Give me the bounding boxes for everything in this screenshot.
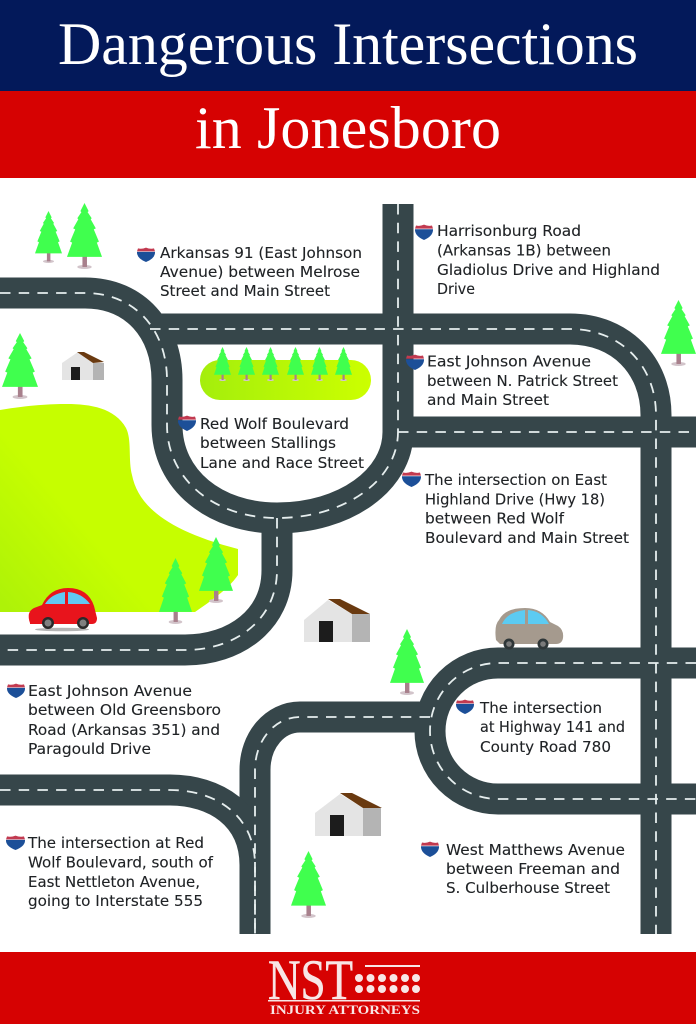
location: East Johnson Avenue, Old Greensboro: East Johnson Avenue: [28, 683, 192, 700]
icon: highway shield: [406, 355, 424, 370]
location: Red Wolf Boulevard: Red Wolf Boulevard: [200, 416, 349, 433]
location: East Johnson Avenue, Old Greensboro: Paragould Drive: [28, 741, 151, 758]
location: East Johnson Avenue, N. Patrick: and Main Street: [427, 392, 549, 409]
icon: highway shield: [6, 836, 25, 850]
lane markings: [0, 204, 696, 934]
car: red: [29, 588, 97, 631]
location: Red Wolf Boulevard, Interstate 555: Wolf Boulevard, south of: [28, 854, 214, 872]
location: East Johnson Avenue, Old Greensboro: [7, 683, 221, 758]
footer band: [0, 949, 696, 1024]
location: Arkansas 91: Street and Main Street: [160, 283, 330, 300]
location: Highway 141: County Road 780: [480, 739, 611, 756]
title banner: [0, 0, 696, 178]
location: East Johnson Avenue, N. Patrick: [406, 354, 618, 409]
location: Harrisonburg Road: (Arkansas 1B) between: [437, 242, 611, 260]
location: West Matthews Avenue: between Freeman and: [446, 861, 620, 878]
location: East Highland Drive: The intersection on East: [424, 472, 607, 489]
house: middle: [304, 599, 370, 642]
icon: highway shield: [456, 700, 474, 714]
location: Highway 141: at Highway 141 and: [480, 719, 625, 736]
title line 2: in Jonesboro: [195, 95, 501, 161]
location: Arkansas 91: Avenue) between Melrose: [160, 264, 360, 281]
location: Highway 141: [456, 700, 625, 756]
icon: highway shield: [415, 225, 433, 240]
house: small: [62, 352, 104, 380]
icon: highway shield: [402, 472, 421, 487]
location: East Highland Drive: between Red Wolf: [425, 510, 565, 528]
road network: [0, 204, 696, 934]
logo: [268, 949, 420, 1017]
location: Arkansas 91: Arkansas 91 (East Johnson: [160, 245, 362, 262]
location: East Johnson Avenue, N. Patrick: between N. Patrick Street: [427, 373, 618, 390]
icon: highway shield: [137, 248, 155, 262]
location: East Highland Drive: Boulevard and Main Street: [425, 530, 629, 547]
location: Arkansas 91: [137, 245, 362, 300]
location: West Matthews Avenue: S. Culberhouse Street: [446, 880, 610, 897]
location: Red Wolf Boulevard, Interstate 555: [6, 835, 214, 910]
location: East Highland Drive: [402, 472, 629, 547]
location: East Highland Drive: Highland Drive (Hwy 18): [425, 492, 605, 508]
logo: NST: [268, 949, 353, 1012]
location: East Johnson Avenue, Old Greensboro: Road (Arkansas 351) and: [28, 722, 220, 739]
location: Red Wolf Boulevard, Interstate 555: The intersection at Red: [27, 835, 204, 852]
icon: highway shield: [178, 416, 196, 431]
location: West Matthews Avenue: West Matthews Avenue: [446, 842, 625, 859]
location: East Johnson Avenue, N. Patrick: East Johnson Avenue: [427, 354, 591, 370]
trees: [2, 203, 696, 918]
icon: highway shield: [421, 842, 439, 857]
car: grey: [495, 608, 563, 650]
location: West Matthews Avenue: [421, 842, 625, 897]
location: East Johnson Avenue, Old Greensboro: between Old Greensboro: [28, 702, 221, 719]
small green park: [200, 360, 371, 400]
location: Harrisonburg Road: Harrisonburg Road: [437, 223, 581, 240]
house: lower: [315, 793, 382, 836]
logo: INJURY ATTORNEYS: [270, 1003, 420, 1017]
location: Harrisonburg Road: Gladiolus Drive and Highland: [437, 262, 660, 279]
location: Red Wolf Boulevard: Lane and Race Street: [200, 455, 364, 472]
location: Red Wolf Boulevard: [178, 416, 364, 472]
location: Harrisonburg Road: Drive: [437, 281, 475, 298]
title line 1: Dangerous Intersections: [58, 11, 638, 77]
location: Highway 141: The intersection: [479, 700, 602, 717]
icon: highway shield: [7, 684, 25, 698]
location: Harrisonburg Road: [415, 223, 660, 298]
location: Red Wolf Boulevard: between Stallings: [200, 435, 336, 452]
location: Red Wolf Boulevard, Interstate 555: East Nettleton Avenue,: [28, 874, 200, 891]
green field: [0, 404, 238, 612]
location: Red Wolf Boulevard, Interstate 555: going to Interstate 555: [28, 893, 203, 910]
